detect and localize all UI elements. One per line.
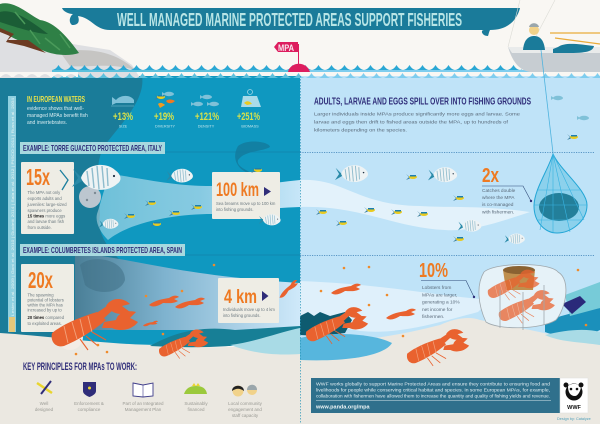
section divider lines (165, 152, 300, 255)
big fish with eggs (60, 165, 121, 208)
callout: 15x: 15 times more eggs (28, 214, 65, 218)
callout: 15x: 15x (26, 164, 50, 190)
text: in European waters: managed MPAs benefit fish (27, 113, 88, 119)
callout: 20x: potential of lobsters (28, 298, 64, 302)
fishing boat with fisherman (508, 0, 600, 72)
principle: sustainably financed: Sustainably (184, 401, 208, 406)
callout: 10% lobsters: fishermen. (422, 314, 444, 320)
principle: local community: Local community (228, 401, 263, 406)
principle: enforcement (74, 382, 104, 412)
callout: 15x: The MPA not only (28, 190, 61, 195)
callout: 2x catches: 2x (482, 165, 499, 187)
callout: 10% lobsters (419, 260, 475, 320)
panel: WWF statement (311, 378, 560, 413)
callout: 20x: within the MPA has (28, 302, 63, 308)
principle: sustainably financed: financed (187, 407, 205, 412)
principle: well designed: designed (35, 407, 54, 412)
callout: 10% lobsters: 10% (419, 260, 448, 282)
principle: sustainably financed (184, 383, 208, 412)
callout: 20x: 20 times compared (28, 315, 65, 320)
title banner (62, 8, 520, 36)
fish and larvae, Italy (99, 167, 281, 229)
banner: Columbretes example (20, 244, 185, 256)
side note with references: Lester et al. 2009 | Goni et al. 2010 | Guidetti 2014 | Sala et al. 2012 | PISCO 2011 | Russ et al. 2004 (11, 98, 15, 316)
callout: 20x: 20x (28, 267, 53, 293)
callout: 2x catches: where the MPA (482, 195, 515, 201)
banner: Torre Guaceto example (20, 142, 165, 154)
principle: local community: engagement and (228, 407, 262, 412)
callout: 15x: exports adults and (28, 196, 62, 201)
larvae stream: left (97, 174, 300, 240)
callout: 20x: The spawning (28, 292, 54, 298)
text: spill-over explanation: larvae and eggs then drift to fished areas outside the MPA, up to hundreds of (314, 120, 509, 126)
stat: size (111, 96, 134, 128)
callout: 15x: from outside. (28, 225, 52, 230)
MPA marker flag and buoy: MPA (278, 43, 294, 53)
text: spill-over explanation (314, 112, 520, 134)
principle: management plan: Part of an Integrated (122, 401, 164, 406)
principle: local community (228, 385, 263, 418)
callout: 2x catches: is co-managed (482, 202, 514, 208)
callout: 2x catches (482, 165, 532, 216)
callout: 15x (21, 162, 74, 234)
stat: biomass: BIOMASS (241, 124, 259, 128)
callout: 4 km: into fishing grounds. (223, 313, 260, 318)
callout: 10% lobsters: generating a 10% (422, 300, 460, 306)
icon: fishing net (534, 154, 587, 233)
logo: WWF panda (560, 378, 588, 413)
stat: biomass: +251% (237, 111, 260, 123)
lobsters on right seabed (306, 266, 587, 366)
panel: WWF statement: collaboration with fishermen have allowed them to increase the quantity and quality of fishing yields and revenue. (316, 394, 550, 400)
stat: size: +13% (113, 111, 133, 123)
callout: 100 km: Sea breams move up to 100 km (216, 201, 276, 206)
text: spill-over explanation: kilometers depending on the species. (314, 128, 407, 134)
seagrass (150, 282, 600, 360)
callout: 20x: to exploited areas. (28, 321, 62, 326)
callout: 4 km: 4 km (224, 287, 257, 308)
principle: management plan: Management Plan (125, 407, 162, 412)
MPA marker flag and buoy (274, 42, 310, 72)
boundary dashed line (300, 76, 302, 424)
lobsters and eggs, Spain (52, 264, 301, 359)
panel: WWF statement: livelihoods for people while conserving critical habitat and species. In some European MPAs, for example, (316, 388, 550, 394)
callout: 100 km: 100 km (216, 180, 259, 201)
panel: left sea, marine protected area (0, 76, 300, 346)
stat: diversity (154, 92, 175, 128)
principle: enforcement: Enforcement & (74, 401, 104, 406)
waves at the surface (0, 64, 600, 78)
principle: enforcement: compliance (78, 407, 101, 412)
sand seabed (0, 318, 600, 424)
text: in European waters: and invertebrates. (27, 120, 67, 126)
icon: lobster trap (479, 264, 566, 330)
callout: 4 km: Individuals move up to 4 km (223, 307, 275, 312)
callout: 15x: juveniles: large-sized (26, 202, 67, 207)
credit: Design by: Catalyze (557, 417, 591, 421)
principle: management plan (122, 383, 164, 412)
stat: density: DENSITY (198, 124, 215, 128)
stat: biomass (237, 90, 261, 128)
island with pine tree (0, 3, 140, 78)
panel: right sea, fishing grounds (300, 76, 600, 346)
principle: local community: staff capacity (232, 413, 259, 418)
stat: diversity: DIVERSITY (155, 124, 175, 128)
principle: well designed (35, 381, 54, 412)
text: in European waters (27, 95, 88, 126)
callout: 100 km: into fishing grounds. (216, 207, 253, 212)
text: spill-over explanation: Larger individuals inside MPAs produce significantly more eggs and larvae. Some (314, 112, 520, 118)
text: in European waters: evidence shows that well- (27, 106, 84, 112)
callout: 10% lobsters: net income for (422, 307, 453, 313)
stat: size: SIZE (119, 124, 128, 128)
fishing line (541, 50, 553, 153)
fish and larvae, right (316, 96, 589, 244)
callout: 15x: spawners produce (28, 208, 62, 213)
stat: diversity: +19% (154, 111, 174, 123)
callout: 20x: increased by up to (28, 308, 62, 312)
callout: 2x catches: with fishermen. (482, 210, 514, 216)
callout: 10% lobsters: Lobsters from (422, 285, 451, 291)
callout: 20x (21, 264, 74, 332)
stat: density (191, 95, 219, 128)
callout: 100 km (212, 172, 280, 219)
principle: well designed: Well (40, 401, 48, 406)
stat: density: +121% (195, 111, 219, 123)
banner: Columbretes example: EXAMPLE: COLUMBRETES ISLANDS PROTECTED AREA, SPAIN (23, 245, 182, 255)
callout: 10% lobsters: MPAs are larger, (422, 292, 457, 298)
heading: key principles: KEY PRINCIPLES FOR MPAs TO WORK: (23, 361, 137, 373)
text: in European waters: IN EUROPEAN WATERS (27, 95, 85, 104)
logo: WWF panda: WWF (567, 405, 582, 411)
callout: 15x: and larvae than fish (28, 219, 65, 224)
panel: WWF statement: www.panda.org/mpa (315, 404, 371, 410)
callout: 2x catches: Catches double (482, 188, 516, 194)
callout: 4 km (218, 278, 279, 323)
side note with references (8, 96, 16, 332)
panel: WWF statement: WWF works globally to support Marine Protected Areas and ensure they contribute to ensuring food and (316, 382, 550, 388)
banner: Torre Guaceto example: EXAMPLE: TORRE GUACETO PROTECTED AREA, ITALY (23, 143, 162, 153)
